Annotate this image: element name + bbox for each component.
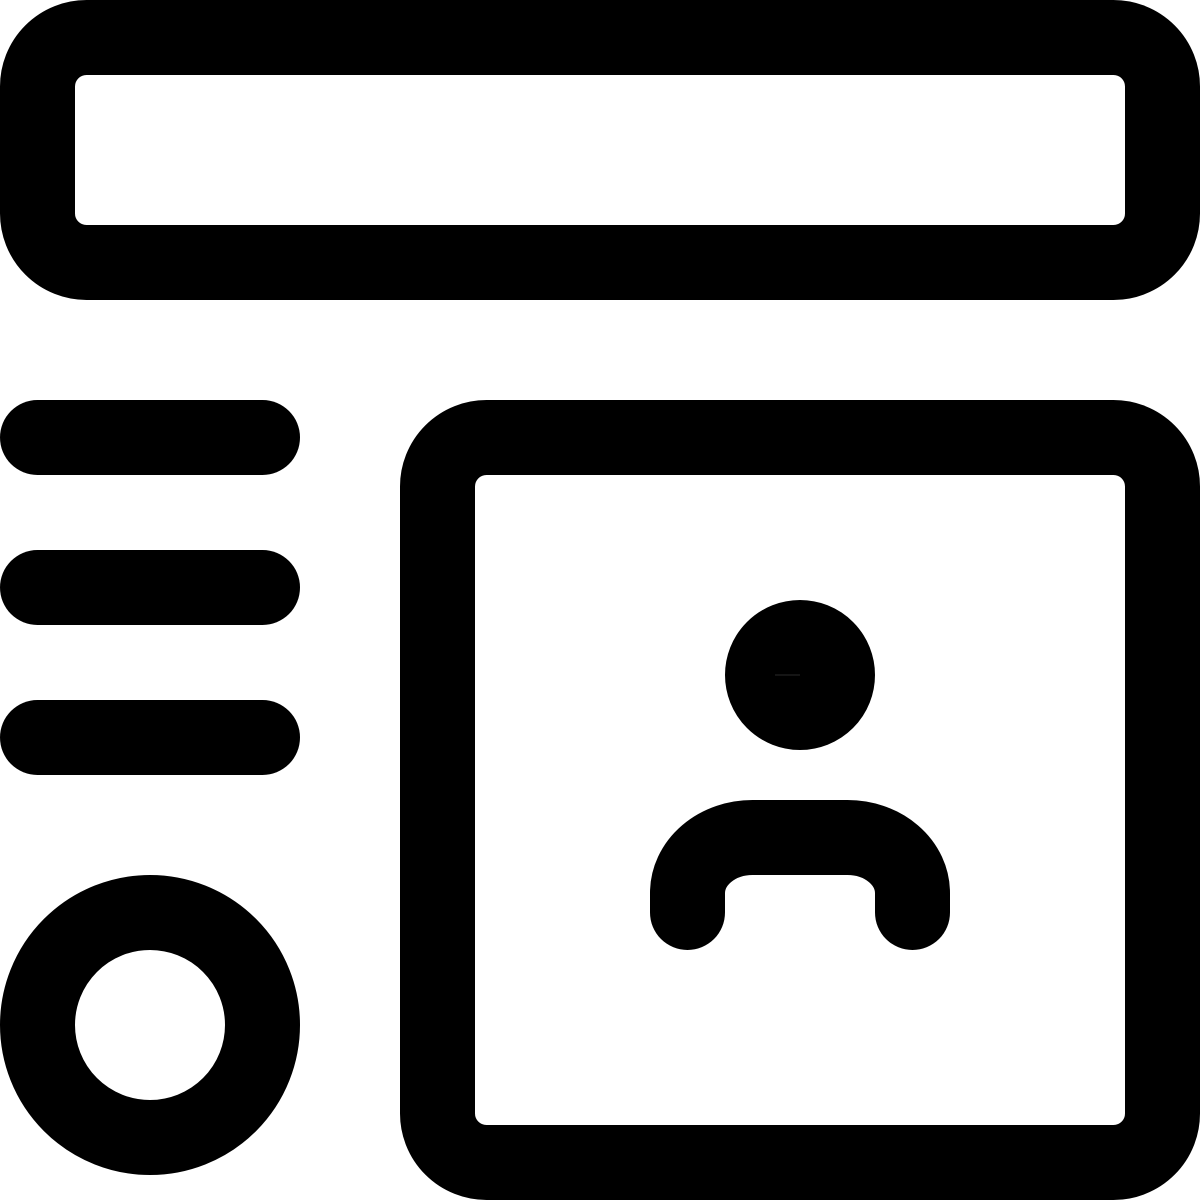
text line 3	[38, 700, 262, 775]
header bar	[38, 38, 1162, 262]
person shoulders	[688, 838, 912, 912]
circle button	[38, 912, 262, 1138]
text line 2	[38, 550, 262, 625]
head center hairline	[775, 674, 800, 676]
text line 1	[38, 400, 262, 475]
profile card frame	[438, 438, 1162, 1162]
person head	[762, 638, 838, 712]
